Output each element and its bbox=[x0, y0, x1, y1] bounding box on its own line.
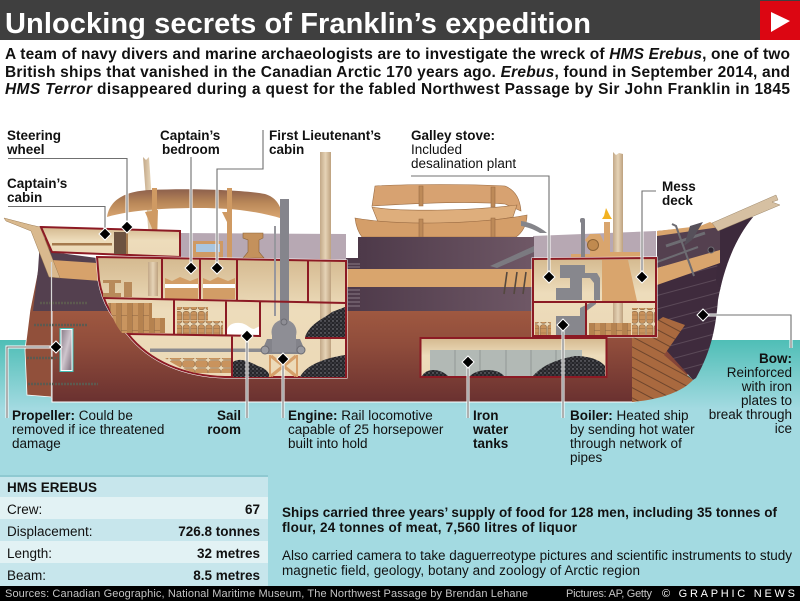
coal heaps bbox=[305, 307, 345, 337]
label: captain's bedroom: Captain’s bbox=[160, 128, 220, 143]
skylight and capstan on deck bbox=[193, 233, 264, 258]
mast through hold bbox=[320, 262, 331, 362]
label: engine: Engine: Rail locomotive bbox=[288, 408, 433, 423]
stern section bbox=[25, 238, 52, 397]
intro text bbox=[5, 46, 790, 98]
text block: scientific equipment: magnetic field, geology, botany and zoology of Arctic region bbox=[282, 563, 640, 578]
crates bbox=[108, 303, 165, 333]
row: length: Length: bbox=[7, 546, 52, 561]
row: length bbox=[7, 546, 260, 561]
aft cabin bbox=[41, 227, 180, 257]
row: crew: Crew: bbox=[7, 502, 42, 517]
text block: scientific equipment bbox=[282, 548, 792, 578]
label: iron water tanks: Iron bbox=[473, 408, 498, 423]
chain plates bbox=[27, 303, 98, 384]
fore mast bbox=[613, 152, 623, 336]
galley stove bbox=[556, 265, 600, 300]
row: beam: 8.5 metres bbox=[193, 568, 260, 583]
label: captain's cabin: Captain’s bbox=[7, 176, 67, 191]
label: bow: break through bbox=[709, 407, 792, 422]
label: galley stove: Included bbox=[411, 142, 462, 157]
label: first lieutenant's cabin: First Lieutenant’s bbox=[269, 128, 381, 143]
barrels lower hold bbox=[165, 358, 231, 373]
bowsprit bbox=[712, 195, 780, 231]
stern tan band bbox=[52, 260, 101, 281]
compartment walls bbox=[103, 258, 346, 376]
label: bow: Bow: bbox=[759, 351, 792, 366]
credit: © GRAPHIC NEWS bbox=[662, 588, 795, 600]
label: boiler: pipes bbox=[570, 450, 603, 465]
label: iron water tanks: water bbox=[472, 422, 509, 437]
row: crew bbox=[7, 502, 260, 517]
label: first lieutenant's cabin: cabin bbox=[269, 142, 304, 157]
header bar bbox=[0, 0, 800, 40]
mid-ship bands bbox=[346, 237, 534, 311]
label: bow: with iron bbox=[741, 379, 792, 394]
text block: supplies: flour, 24 tonnes of meat, 7,560 litres of liquor bbox=[282, 520, 578, 535]
label: sail room: room bbox=[207, 422, 241, 437]
iron water tanks compartment bbox=[420, 338, 606, 377]
ship's boat on stern deck bbox=[107, 188, 283, 260]
stacked boats amidships bbox=[355, 184, 547, 237]
table heading: HMS EREBUS bbox=[7, 480, 97, 495]
label: bow: plates to bbox=[741, 393, 792, 408]
row: displacement bbox=[7, 524, 260, 539]
bow planks bbox=[632, 317, 693, 402]
label: galley stove: desalination plant bbox=[411, 156, 516, 171]
crates forward bbox=[589, 323, 631, 335]
label: propeller: damage bbox=[12, 436, 61, 451]
label: mess deck: deck bbox=[662, 193, 693, 208]
panel: HMS Erebus stats table bbox=[0, 475, 268, 586]
stern spar bbox=[4, 218, 60, 278]
icon: ship bell bbox=[602, 208, 612, 219]
text block: supplies bbox=[282, 505, 778, 535]
label: propeller: Propeller: Could be bbox=[12, 408, 133, 423]
text block: scientific equipment: Also carried camera to take daguerreotype pictures and scientific instruments to study bbox=[282, 548, 792, 563]
diamond markers bbox=[50, 221, 709, 368]
row: displacement: 726.8 tonnes bbox=[178, 524, 260, 539]
intro text: HMS Terror disappeared during a quest for the fabled Northwest Passage by Sir John Franklin in 1845 bbox=[5, 81, 790, 98]
icon: red play button bbox=[760, 1, 800, 40]
propeller bbox=[60, 328, 74, 372]
funnel bbox=[280, 199, 289, 325]
row: crew: 67 bbox=[245, 502, 260, 517]
background water bbox=[0, 340, 800, 586]
label: steering wheel: wheel bbox=[6, 142, 45, 157]
footer bar bbox=[0, 586, 800, 601]
rudder post line bbox=[50, 262, 52, 398]
sources: Sources: Canadian Geographic, National Maritime Museum, The Northwest Passage by Brendan Lehane bbox=[5, 588, 528, 600]
label: iron water tanks: tanks bbox=[473, 436, 508, 451]
label: mess deck: Mess bbox=[662, 179, 696, 194]
label: engine: capable of 25 horsepower bbox=[288, 422, 444, 437]
label: captain's bedroom: bedroom bbox=[162, 142, 220, 157]
label: galley stove: Galley stove: bbox=[411, 128, 495, 143]
cots bbox=[165, 277, 235, 299]
label: bow: Reinforced bbox=[727, 365, 792, 380]
intro text: British ships that vanished in the Canadian Arctic 170 years ago. Erebus, found in September 2014, and bbox=[5, 64, 790, 81]
label: captain's cabin: cabin bbox=[7, 190, 42, 205]
mast in lower hold bbox=[613, 303, 623, 335]
label: boiler: by sending hot water bbox=[570, 422, 695, 437]
row: beam bbox=[7, 568, 260, 583]
steam engine bbox=[261, 319, 305, 377]
bow upper works bbox=[657, 225, 720, 268]
deck lines bbox=[533, 302, 656, 336]
aft accommodation and hold bbox=[97, 199, 346, 377]
label: propeller: removed if ice threatened bbox=[12, 422, 164, 437]
picture credit: Pictures: AP, Getty bbox=[566, 588, 652, 600]
row: displacement: Displacement: bbox=[7, 524, 93, 539]
deck backdrop bbox=[180, 231, 656, 262]
steering wheel bbox=[52, 232, 128, 254]
mid mast bbox=[320, 152, 331, 362]
title: Unlocking secrets of Franklin’s expedition bbox=[5, 8, 591, 40]
leader lines bbox=[7, 130, 791, 418]
label: boiler: Boiler: Heated ship bbox=[570, 408, 689, 423]
text block: supplies: Ships carried three years’ supply of food for 128 men, including 35 tonnes of bbox=[282, 505, 778, 520]
timber partition bbox=[602, 260, 637, 301]
label: sail room: Sail bbox=[217, 408, 241, 423]
hull bbox=[52, 300, 718, 402]
barrels mid hold bbox=[177, 307, 208, 320]
deck fittings forward bbox=[571, 208, 640, 261]
barrels forward bbox=[632, 308, 655, 335]
sails bbox=[227, 323, 260, 336]
longitudinal pipe bbox=[150, 348, 265, 352]
row: length: 32 metres bbox=[197, 546, 260, 561]
furniture in great cabin bbox=[103, 280, 132, 297]
row: beam: Beam: bbox=[7, 568, 46, 583]
ship cross-section illustration bbox=[4, 152, 780, 402]
label: steering wheel: Steering bbox=[7, 128, 61, 143]
label: bow: ice bbox=[775, 421, 792, 436]
boiler bbox=[556, 300, 596, 335]
label: boiler: through network of bbox=[570, 436, 682, 451]
anchor and fittings bbox=[657, 222, 714, 276]
bow iron plating bbox=[657, 217, 753, 380]
intro text: A team of navy divers and marine archaeologists are to investigate the wreck of HMS Erebus, one of two bbox=[5, 46, 790, 63]
label: engine: built into hold bbox=[288, 436, 368, 451]
forward compartments bbox=[533, 258, 656, 336]
aft mast bbox=[143, 157, 158, 296]
